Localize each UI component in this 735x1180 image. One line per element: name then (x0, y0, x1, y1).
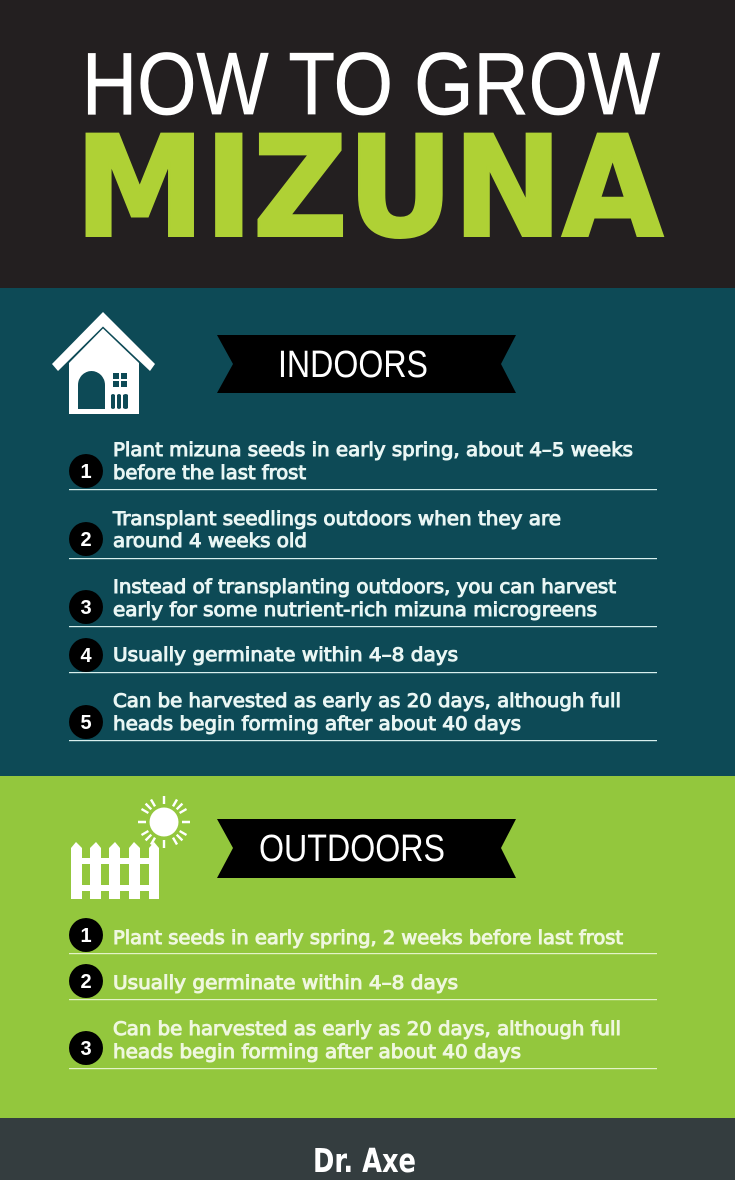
title: how to grow: HOW TO GROW (82, 34, 660, 133)
step 2: Transplant seedlings outdoors when they are (112, 509, 561, 530)
panel: indoors (0, 288, 735, 776)
banner: outdoors: OUTDOORS (259, 828, 445, 870)
step 2: Usually germinate within 4–8 days (113, 973, 458, 994)
icon: house (52, 312, 155, 414)
icon: fence (71, 842, 159, 899)
logo: Dr. Axe: Dr. Axe (313, 1141, 416, 1180)
step 5 (69, 691, 657, 741)
banner: indoors (217, 335, 516, 393)
step 3: 3 (80, 1038, 92, 1060)
step 5: 5 (80, 712, 92, 734)
step 2 (69, 964, 657, 1000)
step 3 (69, 1019, 657, 1069)
step 4 (69, 638, 657, 673)
step 1: Plant mizuna seeds in early spring, about 4–5 weeks (113, 440, 633, 461)
step 5: Can be harvested as early as 20 days, although full (113, 691, 621, 712)
step 2: 2 (80, 971, 92, 993)
step 3: early for some nutrient-rich mizuna microgreens (113, 600, 597, 621)
step 3: Instead of transplanting outdoors, you can harvest (113, 577, 616, 598)
step 3: heads begin forming after about 40 days (113, 1042, 521, 1063)
step 4: Usually germinate within 4–8 days (113, 645, 458, 666)
step 5: heads begin forming after about 40 days (113, 714, 521, 735)
step 1: Plant seeds in early spring, 2 weeks before last frost (113, 928, 623, 949)
panel: header (0, 0, 735, 288)
step 2: 2 (80, 529, 92, 551)
step 1 (69, 440, 657, 490)
icon: sun (138, 796, 190, 848)
step 2: around 4 weeks old (113, 531, 307, 552)
step 3: 3 (80, 597, 92, 619)
banner: indoors: INDOORS (278, 344, 428, 386)
step 1 (69, 918, 657, 954)
step 2 (69, 509, 657, 559)
step 1: 1 (80, 461, 92, 483)
step 3: Can be harvested as early as 20 days, although full (113, 1019, 621, 1040)
panel: outdoors (0, 776, 735, 1118)
title: mizuna: MIZUNA (75, 106, 663, 268)
banner: outdoors (217, 819, 516, 878)
step 1: 1 (80, 925, 92, 947)
panel: footer (0, 1118, 735, 1180)
step 4: 4 (80, 645, 92, 667)
step 1: before the last frost (113, 463, 306, 484)
step 3 (69, 577, 657, 627)
